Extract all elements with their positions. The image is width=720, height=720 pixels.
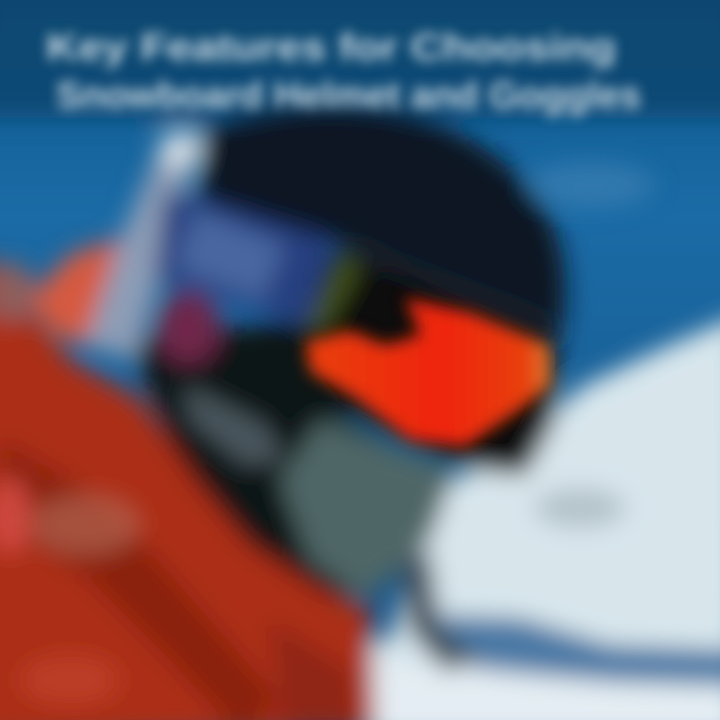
snow slope: [350, 315, 720, 720]
strap logo patch: [156, 292, 220, 364]
phone: [85, 130, 205, 360]
lower blue ridge: [440, 615, 720, 685]
hand/glove: [28, 238, 118, 345]
goggle lens: [305, 298, 552, 447]
title band: [0, 0, 720, 118]
strap: [402, 550, 480, 672]
jacket dark folds: [0, 440, 280, 720]
neck gaiter: [280, 420, 455, 600]
jacket: [0, 240, 375, 720]
helmet: [200, 105, 565, 345]
jacket light patch: [30, 495, 140, 555]
goggle frame: [300, 250, 555, 475]
goggle frame green edge: [305, 258, 360, 330]
title: [46, 27, 641, 117]
dark face side: [130, 320, 430, 610]
bottom snow: [360, 665, 720, 720]
goggle strap: [155, 190, 330, 325]
title: Snowboard Helmet and Goggles: [56, 75, 641, 117]
pale cloud: [525, 163, 655, 207]
title: Key Features for Choosing: [46, 27, 616, 69]
goggle strap highlight: [175, 210, 285, 300]
snow shadow patch: [534, 488, 626, 528]
